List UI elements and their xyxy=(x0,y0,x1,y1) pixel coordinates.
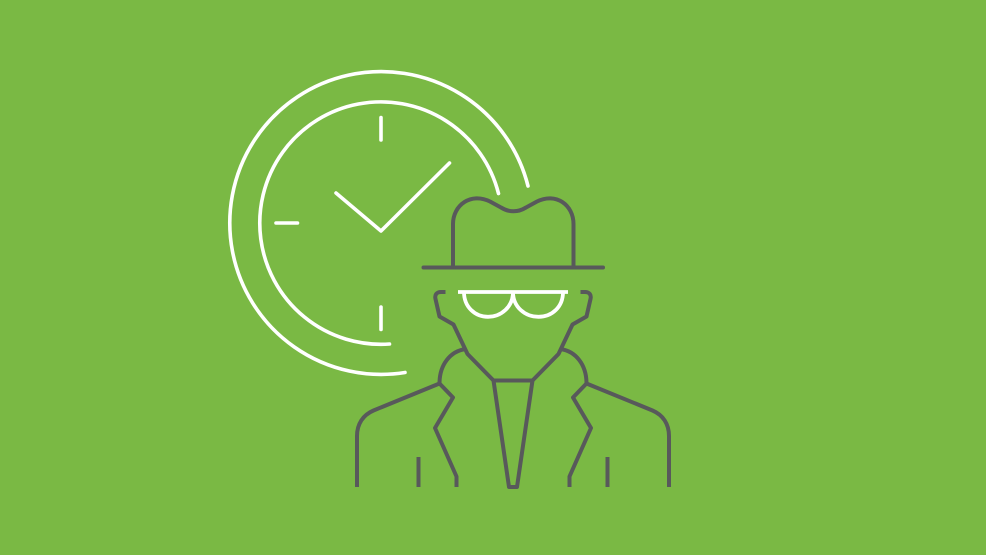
icon: clock xyxy=(230,72,528,374)
icon: sunglasses xyxy=(458,292,568,317)
hat crown xyxy=(453,198,574,268)
hat brim xyxy=(424,266,603,270)
jacket pocket seams xyxy=(418,457,608,487)
left jacket and lapel xyxy=(357,384,456,487)
icon: spy figure xyxy=(357,198,669,487)
clock inner ring xyxy=(260,102,498,344)
necktie xyxy=(494,380,532,487)
face outline xyxy=(435,292,591,380)
right jacket and lapel xyxy=(570,384,669,487)
glasses bar xyxy=(458,290,568,294)
left collar xyxy=(440,349,466,384)
glasses lenses xyxy=(464,292,563,317)
right collar xyxy=(560,349,586,384)
clock outer ring xyxy=(230,72,528,374)
clock tick marks xyxy=(276,118,381,330)
clock hands xyxy=(336,163,450,231)
